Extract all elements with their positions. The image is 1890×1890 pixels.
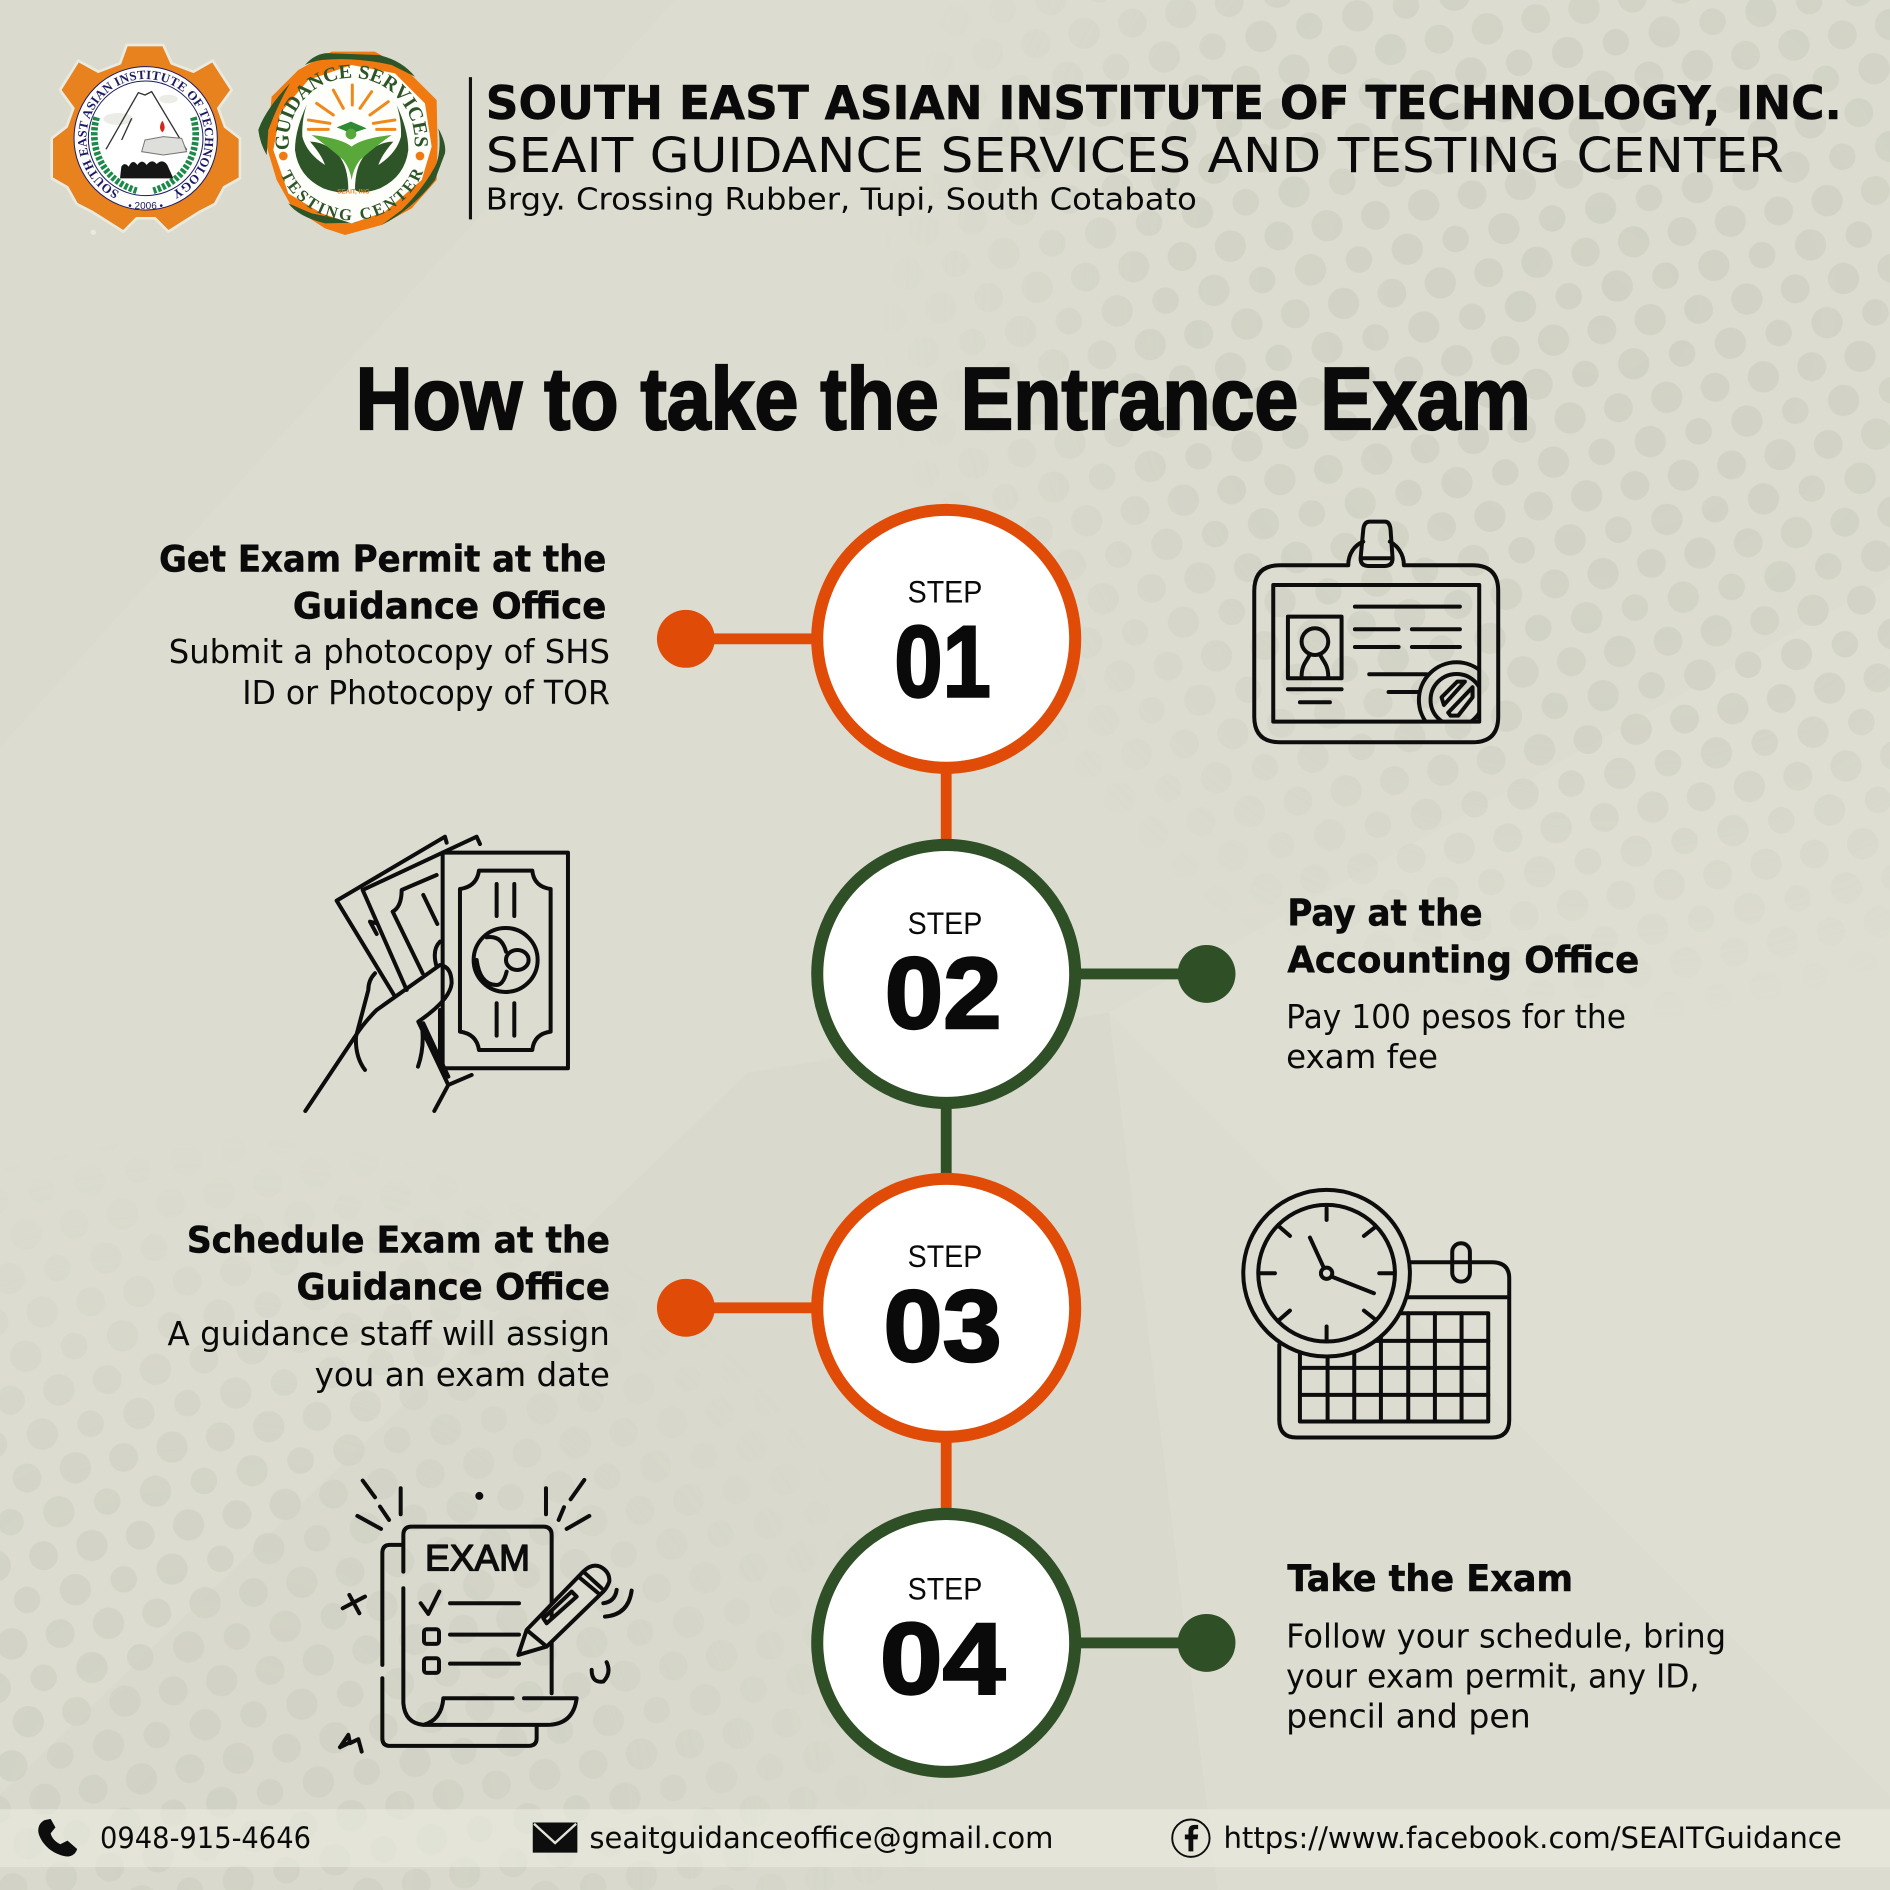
icon: exam paper and pencil: EXAM: [425, 1538, 530, 1579]
icon: ID card: [1254, 522, 1498, 742]
email address: seaitguidanceoffice@gmail.com: [589, 1821, 1053, 1855]
header logo: SEAIT gear seal: [50, 44, 242, 235]
phone number: 0948-915-4646: [100, 1821, 311, 1855]
step 01 node: STEP: [908, 575, 982, 610]
step 03 text: Schedule Exam at the: [187, 1218, 610, 1261]
step 02 text: Accounting Office: [1287, 939, 1639, 982]
step 04 text: your exam permit, any ID,: [1286, 1658, 1700, 1696]
icon: exam paper and pencil: [340, 1480, 632, 1752]
institution heading: SOUTH EAST ASIAN INSTITUTE OF TECHNOLOGY, INC.: [486, 76, 1842, 130]
step 02 text: Pay 100 pesos for the: [1286, 998, 1626, 1036]
step 01 text: [159, 537, 610, 712]
step 02 text: exam fee: [1286, 1038, 1438, 1076]
icon: phone: [38, 1819, 77, 1856]
step 04 text: Follow your schedule, bring: [1286, 1618, 1726, 1656]
header divider: [469, 77, 472, 219]
header logo: guidance services seal: GUIDANCE SERVICES: [275, 64, 428, 150]
step 03 text: you an exam date: [315, 1356, 610, 1394]
step 03 text: A guidance staff will assign: [168, 1315, 610, 1353]
step 03 node: [657, 1179, 1075, 1437]
header logo: guidance services seal: [258, 52, 446, 235]
step 03 node: STEP: [908, 1239, 982, 1274]
step 03 text: Guidance Office: [297, 1265, 610, 1308]
step 02 node: [817, 845, 1235, 1103]
icon: facebook: [1172, 1819, 1210, 1857]
step 02 text: Pay at the: [1287, 892, 1483, 935]
step 04 text: pencil and pen: [1286, 1697, 1531, 1735]
header logo: SEAIT gear seal: SOUTH EAST ASIAN INSTITUTE OF TECHNOLOGY: [78, 70, 214, 199]
step 03 node: 03: [884, 1270, 1002, 1383]
institution heading: SEAIT GUIDANCE SERVICES AND TESTING CENTER: [486, 128, 1784, 184]
step 04 text: [1286, 1557, 1726, 1735]
step 04 node: [817, 1514, 1235, 1772]
step 03 text: [168, 1218, 610, 1394]
header logo: guidance services seal: SEAIT, INC: [337, 189, 370, 196]
timeline connectors: [941, 765, 952, 1519]
title: How to take the Entrance Exam: [356, 349, 1531, 448]
step 01 node: [657, 510, 1075, 768]
facebook url: https://www.facebook.com/SEAITGuidance: [1223, 1821, 1842, 1855]
icon: envelope: [533, 1822, 577, 1853]
step 01 text: Get Exam Permit at the: [159, 537, 606, 580]
step 02 text: [1286, 892, 1639, 1076]
institution heading: [486, 76, 1842, 218]
step 01 text: ID or Photocopy of TOR: [242, 674, 610, 712]
icon: money in hand: [305, 837, 568, 1111]
step 04 node: 04: [880, 1603, 1005, 1716]
header logo: guidance services seal: TESTING CENTER: [282, 169, 424, 220]
icon: calendar and clock: [1243, 1190, 1509, 1438]
step 02 node: 02: [885, 937, 1002, 1050]
step 01 text: Submit a photocopy of SHS: [169, 633, 610, 671]
footer contact band: [0, 1809, 1890, 1867]
step 01 node: 01: [894, 606, 991, 719]
step 04 text: Take the Exam: [1287, 1557, 1573, 1600]
step 02 node: STEP: [908, 906, 982, 941]
step 01 text: Guidance Office: [293, 584, 606, 627]
step 04 node: STEP: [908, 1572, 982, 1607]
institution heading: Brgy. Crossing Rubber, Tupi, South Cotabato: [486, 183, 1197, 218]
header logo: SEAIT gear seal: • 2006 •: [128, 201, 164, 212]
